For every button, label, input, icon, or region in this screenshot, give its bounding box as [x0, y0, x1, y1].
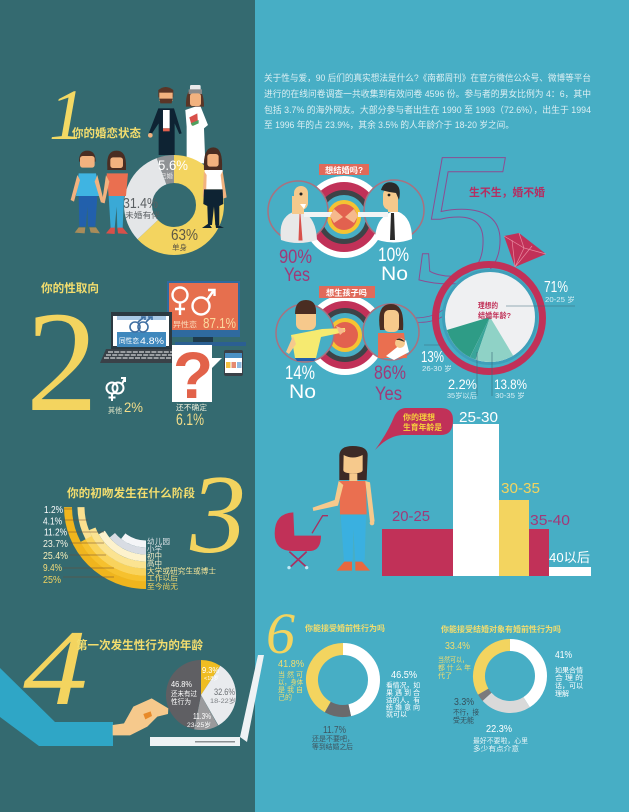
pie labels: 23-25岁	[187, 720, 211, 729]
section 6: premarital sex views	[266, 601, 583, 753]
category labels: 幼儿园	[147, 537, 170, 546]
label: 11.7%	[312, 725, 354, 751]
monitor: heterosexual 87.1%: 87.1%	[203, 315, 236, 332]
label: 22.3%: 22.3%	[486, 724, 512, 735]
connector lines	[413, 308, 445, 322]
pie chart	[177, 671, 225, 719]
label: 41.8%: 以，身体	[278, 678, 303, 686]
label: 13.8%	[494, 376, 527, 400]
label: 3.3%: 不行，接	[453, 708, 479, 716]
section 4: age at first sex	[0, 608, 264, 746]
label: other 2%: 其他	[108, 405, 122, 415]
bar chart: ideal age for children: 30-35	[501, 480, 540, 497]
card: not sure: ?	[173, 338, 213, 412]
result: 90% yes: 90%	[279, 247, 312, 268]
label: 33.4%	[438, 641, 471, 680]
speech bubble: 生育年龄是	[403, 422, 442, 432]
background: left panel	[0, 0, 255, 812]
label: 41%: 话，可以	[555, 681, 583, 690]
result: 10% no	[378, 245, 409, 285]
pie labels: 32.6%	[214, 687, 235, 698]
bar chart: ideal age for children: 35-40	[530, 512, 570, 529]
result: 86% yes: Yes	[375, 384, 402, 405]
laptop edge	[150, 655, 264, 746]
numeral 2: 2	[26, 283, 98, 442]
label: 41%	[555, 649, 583, 698]
label: other 2%: 2%	[124, 399, 143, 415]
bar chart: ideal age for children	[382, 409, 591, 576]
label: 41%: 如果合情	[555, 666, 583, 674]
label: married 5.6%	[158, 157, 188, 180]
intro text: 包括 3.7% 的海外网友。大部分参与者出生在 1990 至 1993（72.6%），出生于 1994	[264, 104, 591, 115]
label: 41.8%: 当 然 可	[278, 670, 303, 679]
label: 3.3%	[453, 697, 479, 724]
heading: orientation: 你的性取向	[41, 281, 99, 295]
label: married 5.6%: 已婚	[160, 171, 174, 180]
laptop: homosexual 4.8%: 同性恋	[119, 336, 139, 345]
label: want children: 想生孩子吗	[326, 288, 367, 298]
figures: single woman	[202, 147, 227, 228]
label: 41.8%: 41.8%	[278, 659, 304, 670]
numeral 6: 6	[266, 601, 295, 666]
section 5: marriage and children	[268, 114, 575, 405]
heading: marital status: 你的婚恋状态	[72, 126, 141, 140]
label: want to marry: 想结婚吗?	[325, 165, 363, 175]
monitor: heterosexual 87.1%	[167, 281, 246, 346]
percent column: 4.1%	[43, 516, 62, 528]
bar chart: ideal age for children: 25-30	[459, 409, 498, 426]
pie labels: 性行为	[171, 697, 191, 706]
donut: accept premarital	[301, 638, 385, 722]
woman	[313, 446, 375, 571]
figures: bride	[185, 85, 208, 163]
section 3: first kiss	[43, 429, 246, 591]
heading: first time: 第一次发生性行为的年龄	[76, 638, 204, 652]
label: 13.8%: 30-35 岁	[495, 391, 525, 400]
intro text: 至 1996 年的占 23.9%，其余 3.5% 的人年龄介于 18-20 岁之间。	[264, 119, 514, 130]
label: 46.5%: 就可以	[386, 710, 407, 718]
label: other 2%	[108, 399, 143, 415]
result: 10% no: No	[381, 264, 408, 285]
ring pie: ideal marriage age	[436, 264, 542, 372]
percent column: 25%	[43, 574, 61, 586]
person: man with tie	[358, 180, 424, 242]
pie labels: 9.3%	[202, 665, 219, 675]
figures: couple	[71, 151, 128, 234]
label: not sure 6.1%: 还不确定	[176, 402, 208, 412]
label: 33.4%: 当然可以，	[438, 655, 468, 664]
pie labels: 还未有过	[171, 689, 197, 698]
label: 41.8%: 己的	[278, 692, 292, 702]
intro text: 关于性与爱，90 后们的真实想法是什么?《南都周刊》在官方微信公众号、微博等平台	[264, 72, 591, 83]
percent column: 11.2%	[44, 526, 67, 538]
section 1: marital status	[49, 75, 227, 256]
category labels: 高中	[147, 559, 162, 568]
label: 71%: 71%	[544, 279, 568, 296]
donut chart	[123, 154, 225, 256]
category labels	[147, 537, 216, 591]
ring pie: ideal marriage age: 理想的	[478, 300, 498, 310]
laptop: homosexual 4.8%	[100, 312, 173, 363]
label: want children	[319, 286, 375, 298]
label: 11.7%: 等到结婚之后	[312, 742, 353, 751]
label: 46.5%: 果 遇 到 合	[386, 688, 420, 697]
label: dating 31.4%: 31.4%	[123, 195, 158, 212]
hand	[113, 698, 168, 735]
background: right panel	[255, 0, 629, 812]
percent column: 1.2%	[44, 504, 63, 516]
result: 14% no: 14%	[285, 363, 315, 384]
person: mother and baby	[363, 304, 419, 360]
label: 11.7%: 还是不要吧，	[312, 735, 354, 743]
pie labels: 46.8%	[171, 679, 192, 689]
label: dating 31.4%	[123, 195, 160, 220]
label: 71%: 20-25 岁	[545, 295, 575, 304]
percent column: 9.4%	[43, 562, 62, 574]
person: man pointing	[276, 300, 346, 362]
category labels: 初中	[147, 552, 162, 560]
result: 14% no	[285, 363, 316, 403]
label: 13.8%: 13.8%	[494, 376, 527, 392]
category labels: 工作以后	[147, 574, 178, 582]
label: 46.5%: 看情况，如	[386, 680, 420, 690]
label: 41.8%: 是 我 自	[278, 685, 303, 694]
pie labels: 18-22岁	[210, 696, 236, 705]
heading: to have kids, to marry: 生不生，婚不婚	[469, 185, 545, 199]
intro text: 进行的在线问卷调查一共收集到有效问卷 4596 份。参与者的男女比例为 4：6，其中	[264, 88, 591, 99]
label: 41%: 理解	[555, 689, 569, 698]
label: single 63%: 63%	[171, 227, 198, 244]
phone icon	[224, 350, 243, 376]
label: 41.8%	[278, 659, 304, 702]
label: 2.2%: 35岁以后	[447, 391, 477, 400]
ring pie: ideal marriage age: 结婚年龄?	[478, 310, 511, 320]
result: 90% yes: Yes	[284, 265, 310, 286]
bar chart: ideal age for children: 20-25	[392, 508, 430, 525]
label: 33.4%: 都 什 么 年	[438, 663, 471, 672]
pie labels: 11.3%	[193, 711, 211, 721]
leader lines	[424, 306, 575, 396]
label: 13%	[421, 349, 452, 373]
arm	[0, 668, 113, 746]
label: 33.4%: 代了	[438, 671, 452, 680]
label: 46.5%: 46.5%	[391, 670, 417, 681]
heading: accept partner: 你能接受结婚对象有婚前性行为吗	[441, 624, 561, 634]
result: 90% yes	[279, 247, 312, 286]
label: 41%: 41%	[555, 649, 572, 661]
pie labels	[171, 665, 236, 729]
label: 22.3%: 多少有点介意	[473, 744, 519, 753]
label: single 63%	[171, 227, 198, 252]
numeral 1: 1	[49, 75, 85, 155]
hands	[330, 209, 358, 223]
icon: diamond	[504, 233, 546, 267]
result: 10% no: 10%	[378, 245, 409, 266]
person: bald man	[268, 181, 334, 243]
label: 3.3%: 受无能	[453, 716, 474, 724]
fan chart	[68, 429, 224, 585]
label: 13%: 26-30 岁	[422, 364, 452, 373]
label: want to marry	[319, 164, 369, 175]
label: 2.2%	[447, 376, 477, 400]
percent column: 25.4%	[43, 550, 68, 562]
label: not sure 6.1%	[176, 402, 208, 429]
numeral 5 outline: 5	[416, 114, 511, 324]
figures: groom	[148, 87, 182, 155]
numeral 3: 3	[189, 453, 246, 577]
percent column: 23.7%	[43, 538, 68, 550]
label: 46.5%: 结 婚 意 向	[386, 702, 420, 712]
heading: accept premarital: 你能接受婚前性行为吗	[305, 623, 385, 633]
target: want to marry	[303, 176, 385, 258]
label: 11.7%: 11.7%	[323, 725, 346, 736]
leader lines	[63, 509, 114, 577]
label: 41%: 合 理 的	[555, 673, 583, 682]
label: not sure 6.1%: 6.1%	[176, 410, 204, 429]
section 2: sexual orientation	[26, 281, 246, 442]
category labels: 大学或研究生或博士	[147, 566, 216, 576]
label: 33.4%: 33.4%	[445, 641, 470, 652]
speech bubble: 你的理想	[403, 412, 435, 422]
label: 22.3%	[473, 724, 528, 753]
speech bubble	[375, 408, 453, 450]
label: dating 31.4%: 未婚有伴	[125, 210, 160, 220]
label: 2.2%: 2.2%	[448, 376, 477, 392]
intro text	[264, 72, 591, 130]
donut: accept partner	[466, 632, 554, 720]
result: 86% yes: 86%	[374, 363, 406, 384]
laptop: homosexual 4.8%: 4.8%	[140, 336, 165, 347]
numeral 4: 4	[23, 608, 88, 728]
pie labels: <18岁	[204, 674, 219, 682]
result: 86% yes	[374, 363, 406, 405]
label: 46.5%	[386, 670, 420, 718]
label: 3.3%: 3.3%	[454, 697, 474, 708]
stroller	[275, 512, 328, 569]
heading: first kiss: 你的初吻发生在什么阶段	[67, 486, 196, 500]
bar chart: ideal age for children: 40以后	[549, 550, 590, 565]
icon: other symbol	[106, 378, 125, 401]
monitor: heterosexual 87.1%: 异性恋	[173, 319, 198, 329]
label: 13%: 13%	[421, 349, 444, 366]
label: 22.3%: 最好不要啦，心里	[473, 736, 528, 745]
category labels: 小学	[147, 544, 162, 554]
result: 14% no: No	[289, 382, 316, 403]
percent column	[43, 504, 68, 586]
category labels: 至今尚无	[147, 582, 178, 591]
label: 71%	[544, 279, 575, 304]
target: want children	[305, 295, 385, 375]
label: 46.5%: 适的人，有	[386, 696, 420, 704]
label: married 5.6%: 5.6%	[158, 157, 188, 173]
label: single 63%: 单身	[172, 242, 187, 252]
